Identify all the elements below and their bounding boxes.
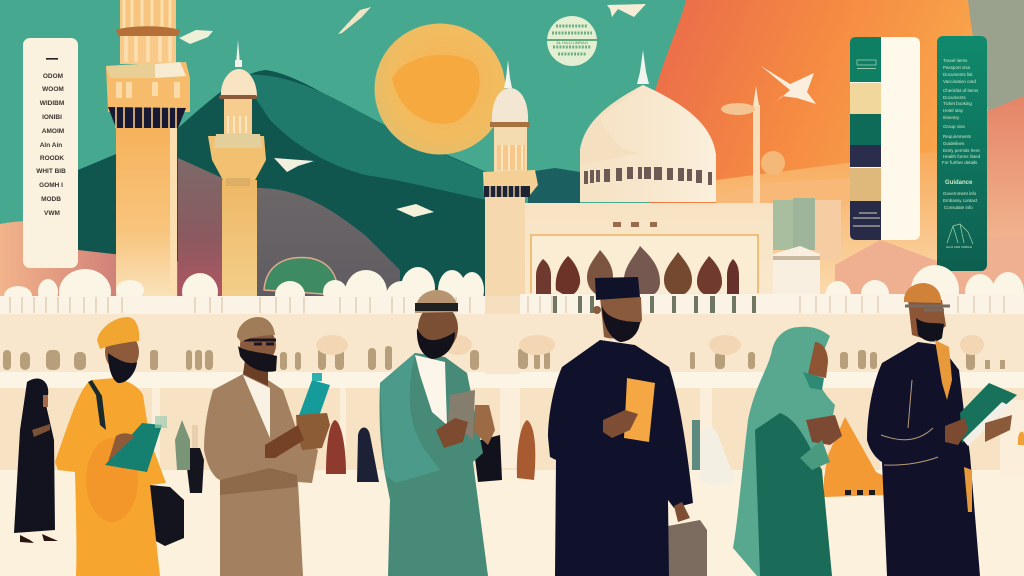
small minaret xyxy=(208,40,266,298)
woman in green hijab xyxy=(733,327,842,576)
man in teal robe xyxy=(380,290,502,576)
emblem medallion xyxy=(547,16,597,66)
plane: mountain right xyxy=(396,204,434,217)
right green text panel: Passport visa xyxy=(943,65,971,70)
right green text panel: Entry permits here xyxy=(943,148,980,153)
robe xyxy=(867,342,980,576)
glasses xyxy=(905,306,950,310)
hall xyxy=(525,203,773,300)
skull cap xyxy=(415,290,458,313)
beard xyxy=(108,353,137,383)
neck and face xyxy=(600,297,642,338)
strap xyxy=(88,380,106,430)
man in brown robe xyxy=(204,317,330,576)
main mosque xyxy=(483,50,773,302)
neck and face xyxy=(418,304,458,352)
passport xyxy=(298,380,330,422)
shirt xyxy=(415,355,447,425)
plane: diagonal xyxy=(338,7,371,34)
right green text panel: Itinerary xyxy=(943,115,960,120)
mountains xyxy=(0,70,580,300)
right green text panel: Checklist of items xyxy=(943,88,979,93)
robe xyxy=(55,378,166,576)
plaza wall and colonnade xyxy=(0,294,1024,576)
hat xyxy=(237,317,275,342)
right green text panel: Documents list xyxy=(943,72,973,77)
beard xyxy=(238,346,277,372)
icon: mountain book xyxy=(947,224,973,244)
colonnade domes xyxy=(4,265,1024,315)
dress xyxy=(755,413,832,576)
right green text panel: Embassy contact xyxy=(943,198,978,203)
plane: near minaret xyxy=(179,30,213,44)
robe xyxy=(204,374,318,576)
right green text panel: Consulate info xyxy=(944,205,973,210)
right minaret spire and haze cloud xyxy=(721,86,760,205)
right green text panel: Requirements xyxy=(943,134,972,139)
right green text panel: Documents xyxy=(943,95,967,100)
beard xyxy=(417,328,455,359)
dome windows xyxy=(584,167,712,185)
right green text panel: Ticket booking xyxy=(943,101,972,106)
hijab xyxy=(733,327,835,576)
emblem medallion: AL HAJJ UMRAH xyxy=(556,40,588,45)
scarf xyxy=(935,340,952,400)
face xyxy=(808,342,828,378)
left text panel: GOMH I xyxy=(39,182,63,189)
head xyxy=(105,332,139,372)
hands xyxy=(436,418,468,448)
glasses xyxy=(244,340,276,344)
shoulder bag xyxy=(150,485,184,546)
right green text panel: Government info xyxy=(943,191,977,196)
right green text panel: HAJJ AND UMRAH xyxy=(946,245,972,249)
sun xyxy=(374,24,506,154)
turban xyxy=(97,317,139,349)
open book xyxy=(960,383,1017,443)
sky background xyxy=(0,0,1024,300)
row of niches xyxy=(3,346,1005,370)
dome xyxy=(580,85,716,202)
robe xyxy=(380,353,488,576)
left text panel: AMOIM xyxy=(42,128,64,135)
large minaret xyxy=(106,0,190,298)
right colour swatch panel xyxy=(850,37,920,240)
book xyxy=(105,423,162,472)
background crowd xyxy=(175,420,1024,493)
robe xyxy=(548,340,693,576)
cap xyxy=(595,277,640,300)
book xyxy=(448,390,475,440)
right green text panel: Travel items xyxy=(943,58,968,63)
left text panel: IONIBI xyxy=(42,114,62,121)
right green text panel: Hotel stay xyxy=(943,108,964,113)
man in black robe xyxy=(548,277,707,576)
plane: mountain left xyxy=(274,158,314,172)
left text panel: ROODK xyxy=(40,155,64,162)
left text panel: WHIT BIB xyxy=(36,168,66,175)
right green text panel: Guidelines xyxy=(943,141,965,146)
left text panel: WOOM xyxy=(42,86,64,93)
cap xyxy=(904,283,941,303)
right green text panel: Health forms listed xyxy=(943,154,981,159)
faint arches xyxy=(316,335,984,355)
man in orange xyxy=(55,317,184,576)
right green text panel: Vaccination card xyxy=(943,79,976,84)
hand on case xyxy=(674,502,690,522)
right green text panel: Guidance xyxy=(945,180,973,186)
hands xyxy=(945,418,968,445)
gold frame xyxy=(531,235,758,293)
shirt xyxy=(243,375,270,438)
face xyxy=(908,300,946,340)
left tower xyxy=(504,60,512,88)
background buildings right xyxy=(770,198,841,296)
beard xyxy=(916,318,944,342)
left text panel: MODB xyxy=(41,196,61,203)
mask xyxy=(803,372,824,390)
right green text panel: Group visa xyxy=(943,124,965,129)
hand xyxy=(603,410,638,438)
left text panel: WIDIBM xyxy=(40,100,64,107)
plane: upper right xyxy=(761,66,816,104)
lower pillars xyxy=(152,388,1024,478)
man in black with orange cap xyxy=(867,283,1017,576)
briefcase xyxy=(668,520,707,576)
planes xyxy=(179,4,816,217)
bag behind xyxy=(473,435,502,482)
hands xyxy=(296,413,330,450)
white balustrade xyxy=(0,296,486,314)
left text panel: ODOM xyxy=(43,73,63,80)
left text panel: Aln Ain xyxy=(40,142,62,149)
plane: top centre xyxy=(607,4,646,17)
hands and phone xyxy=(806,415,842,445)
orange bag behind woman xyxy=(824,417,888,497)
right green text panel: For further details xyxy=(942,160,978,165)
left text panel: VWM xyxy=(44,210,60,217)
left text panel xyxy=(23,38,78,268)
book xyxy=(624,378,655,442)
beard xyxy=(602,306,640,342)
woman in black xyxy=(14,378,58,543)
arches xyxy=(536,259,551,296)
neck and face xyxy=(243,360,268,386)
right green text panel xyxy=(937,36,987,271)
